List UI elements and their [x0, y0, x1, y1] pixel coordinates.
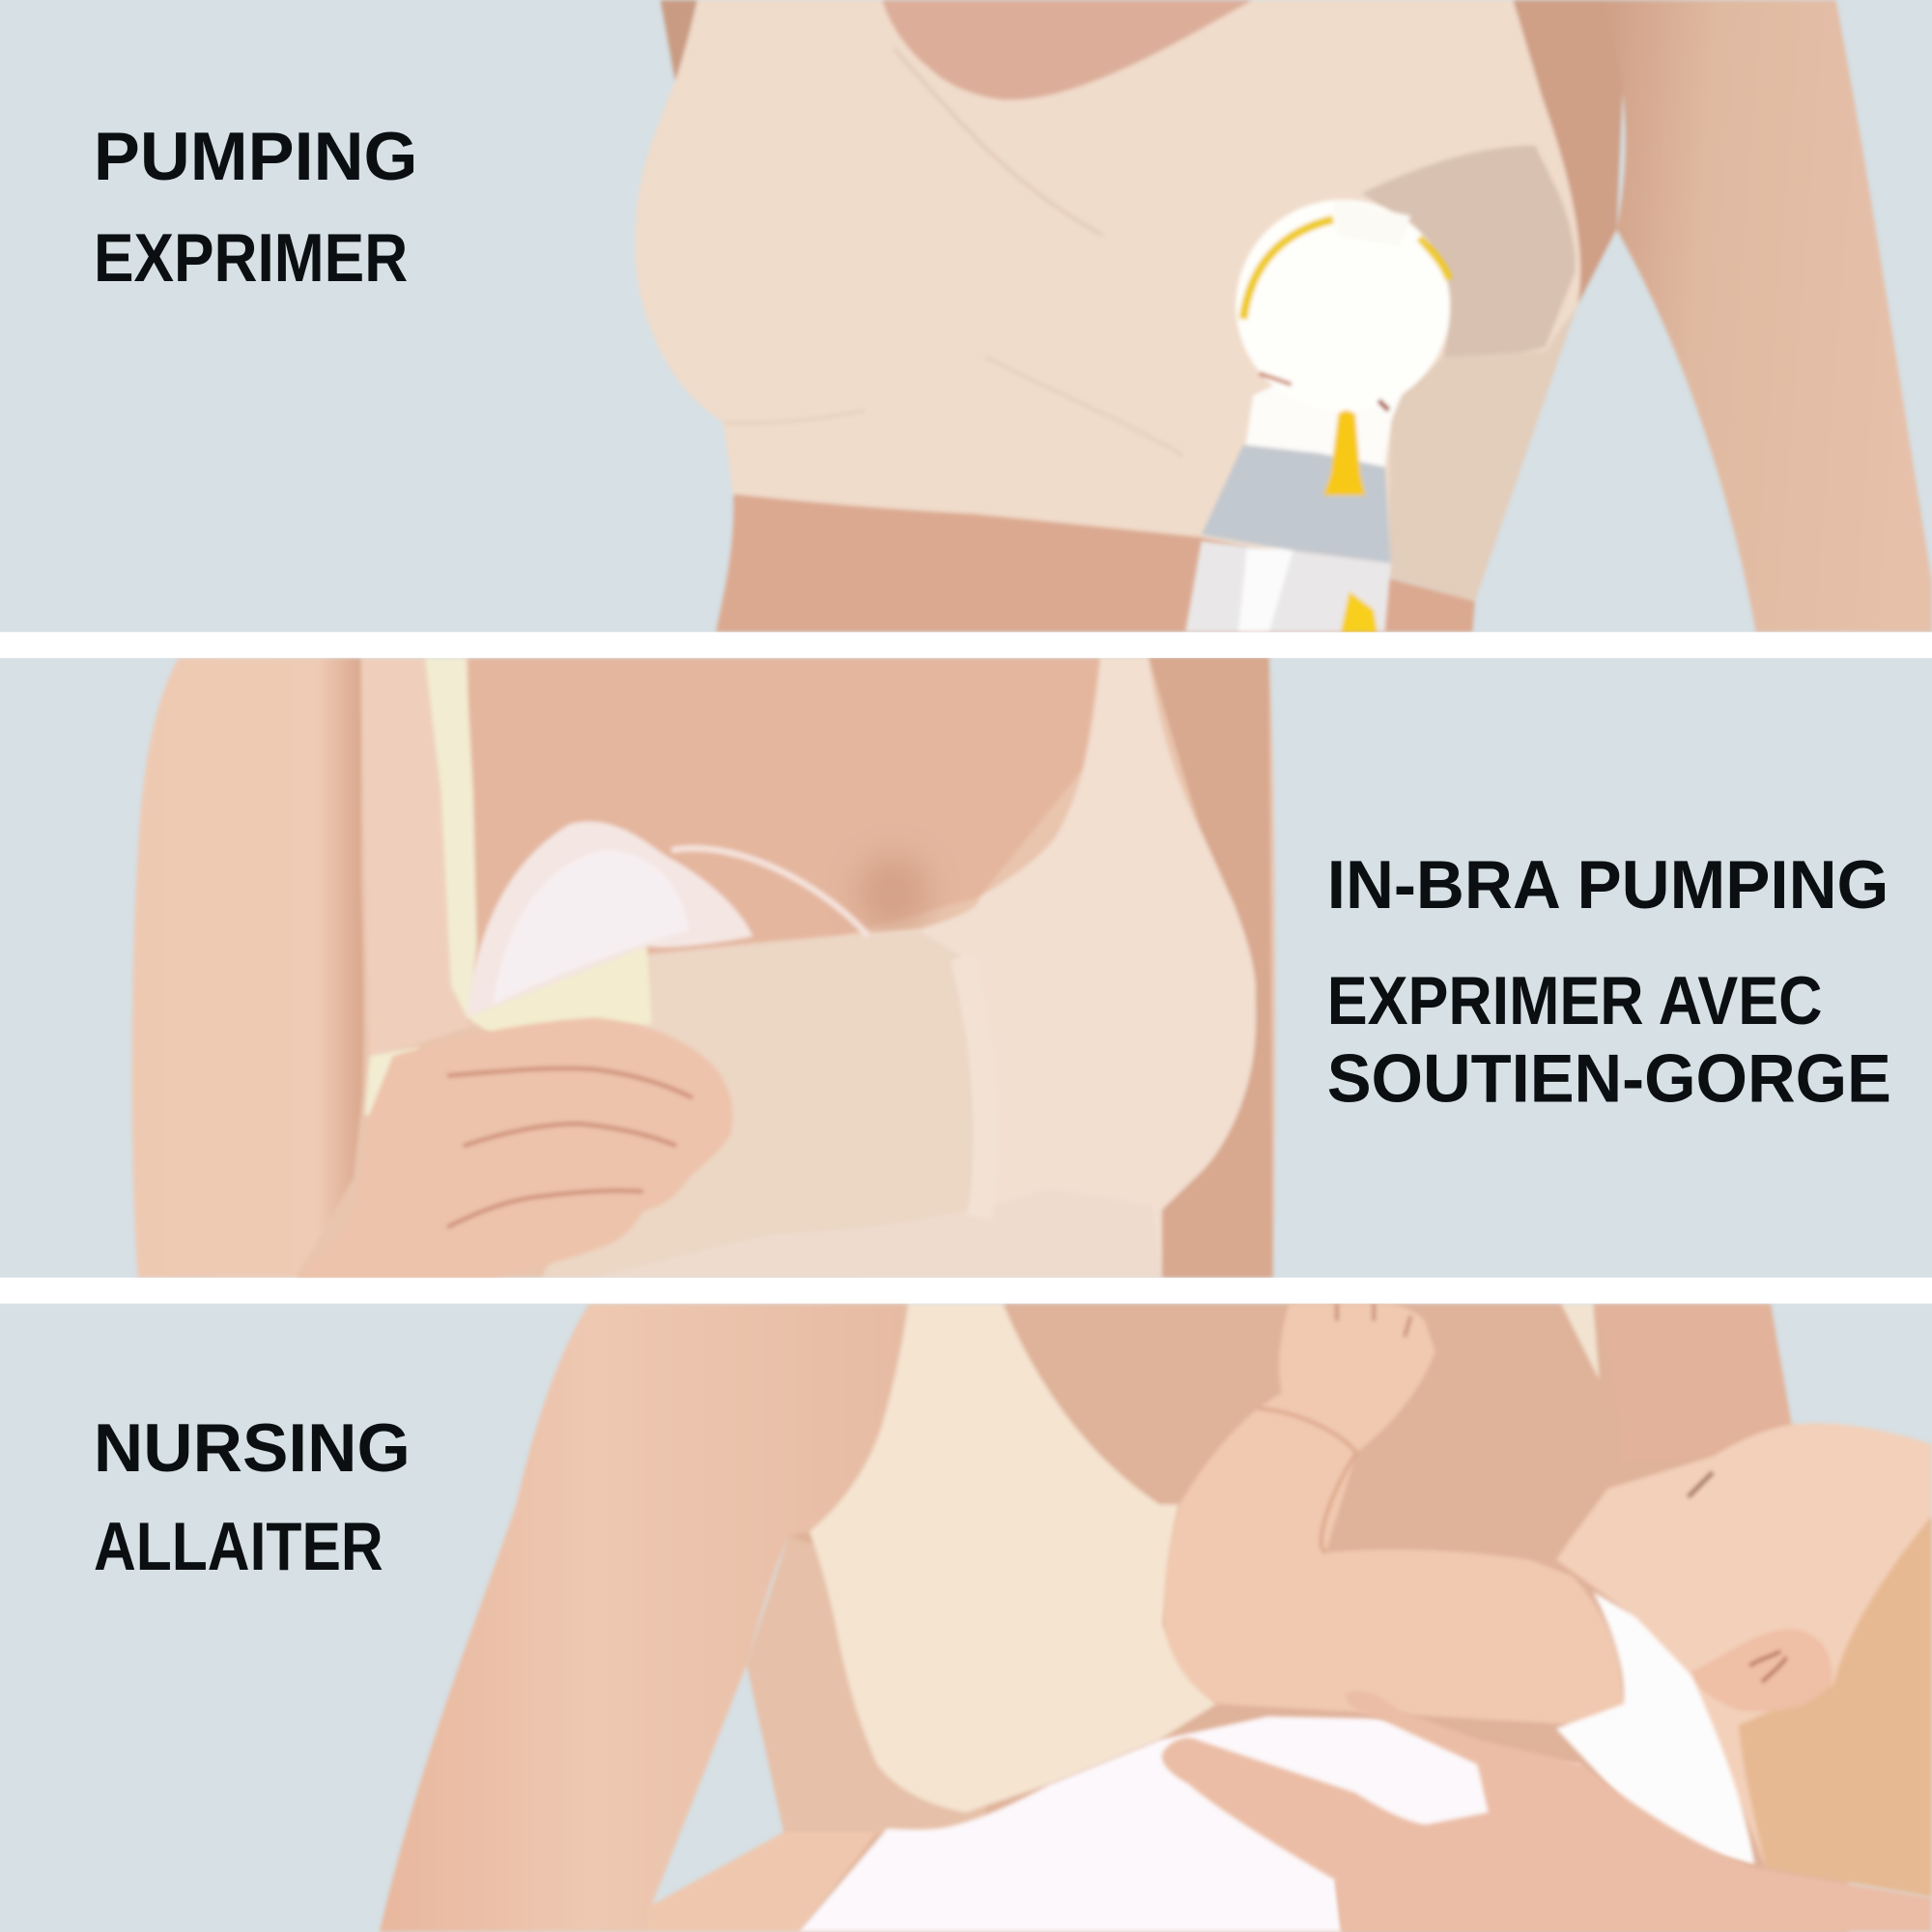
- photo: baby: [799, 1303, 1932, 1932]
- heading: nursing labels: [94, 1409, 411, 1584]
- panel: pumping: [0, 0, 1932, 632]
- photo: mother arm and torso: [380, 1303, 1848, 1932]
- photo: in-bra pumping torso: [132, 657, 1275, 1278]
- heading: pumping labels: PUMPING: [94, 118, 417, 194]
- heading: in-bra pumping labels: IN-BRA PUMPING: [1327, 846, 1889, 923]
- heading: pumping labels: [94, 118, 417, 296]
- photo: supporting hand: [1162, 1690, 1932, 1932]
- heading: in-bra pumping labels: EXPRIMER AVEC: [1327, 962, 1822, 1038]
- heading: in-bra pumping labels: [1327, 846, 1891, 1116]
- photo: pumping bra worn on torso: [636, 0, 1932, 632]
- panel: nursing: [0, 1303, 1932, 1932]
- panel: in-bra pumping: [0, 657, 1932, 1278]
- heading: in-bra pumping labels: SOUTIEN-GORGE: [1327, 1039, 1891, 1116]
- heading: nursing labels: ALLAITER: [94, 1508, 384, 1584]
- heading: nursing labels: NURSING: [94, 1409, 411, 1486]
- icon: breast pump: [1185, 200, 1450, 632]
- photo: hand lifting bra: [296, 1018, 732, 1278]
- heading: pumping labels: EXPRIMER: [94, 219, 408, 296]
